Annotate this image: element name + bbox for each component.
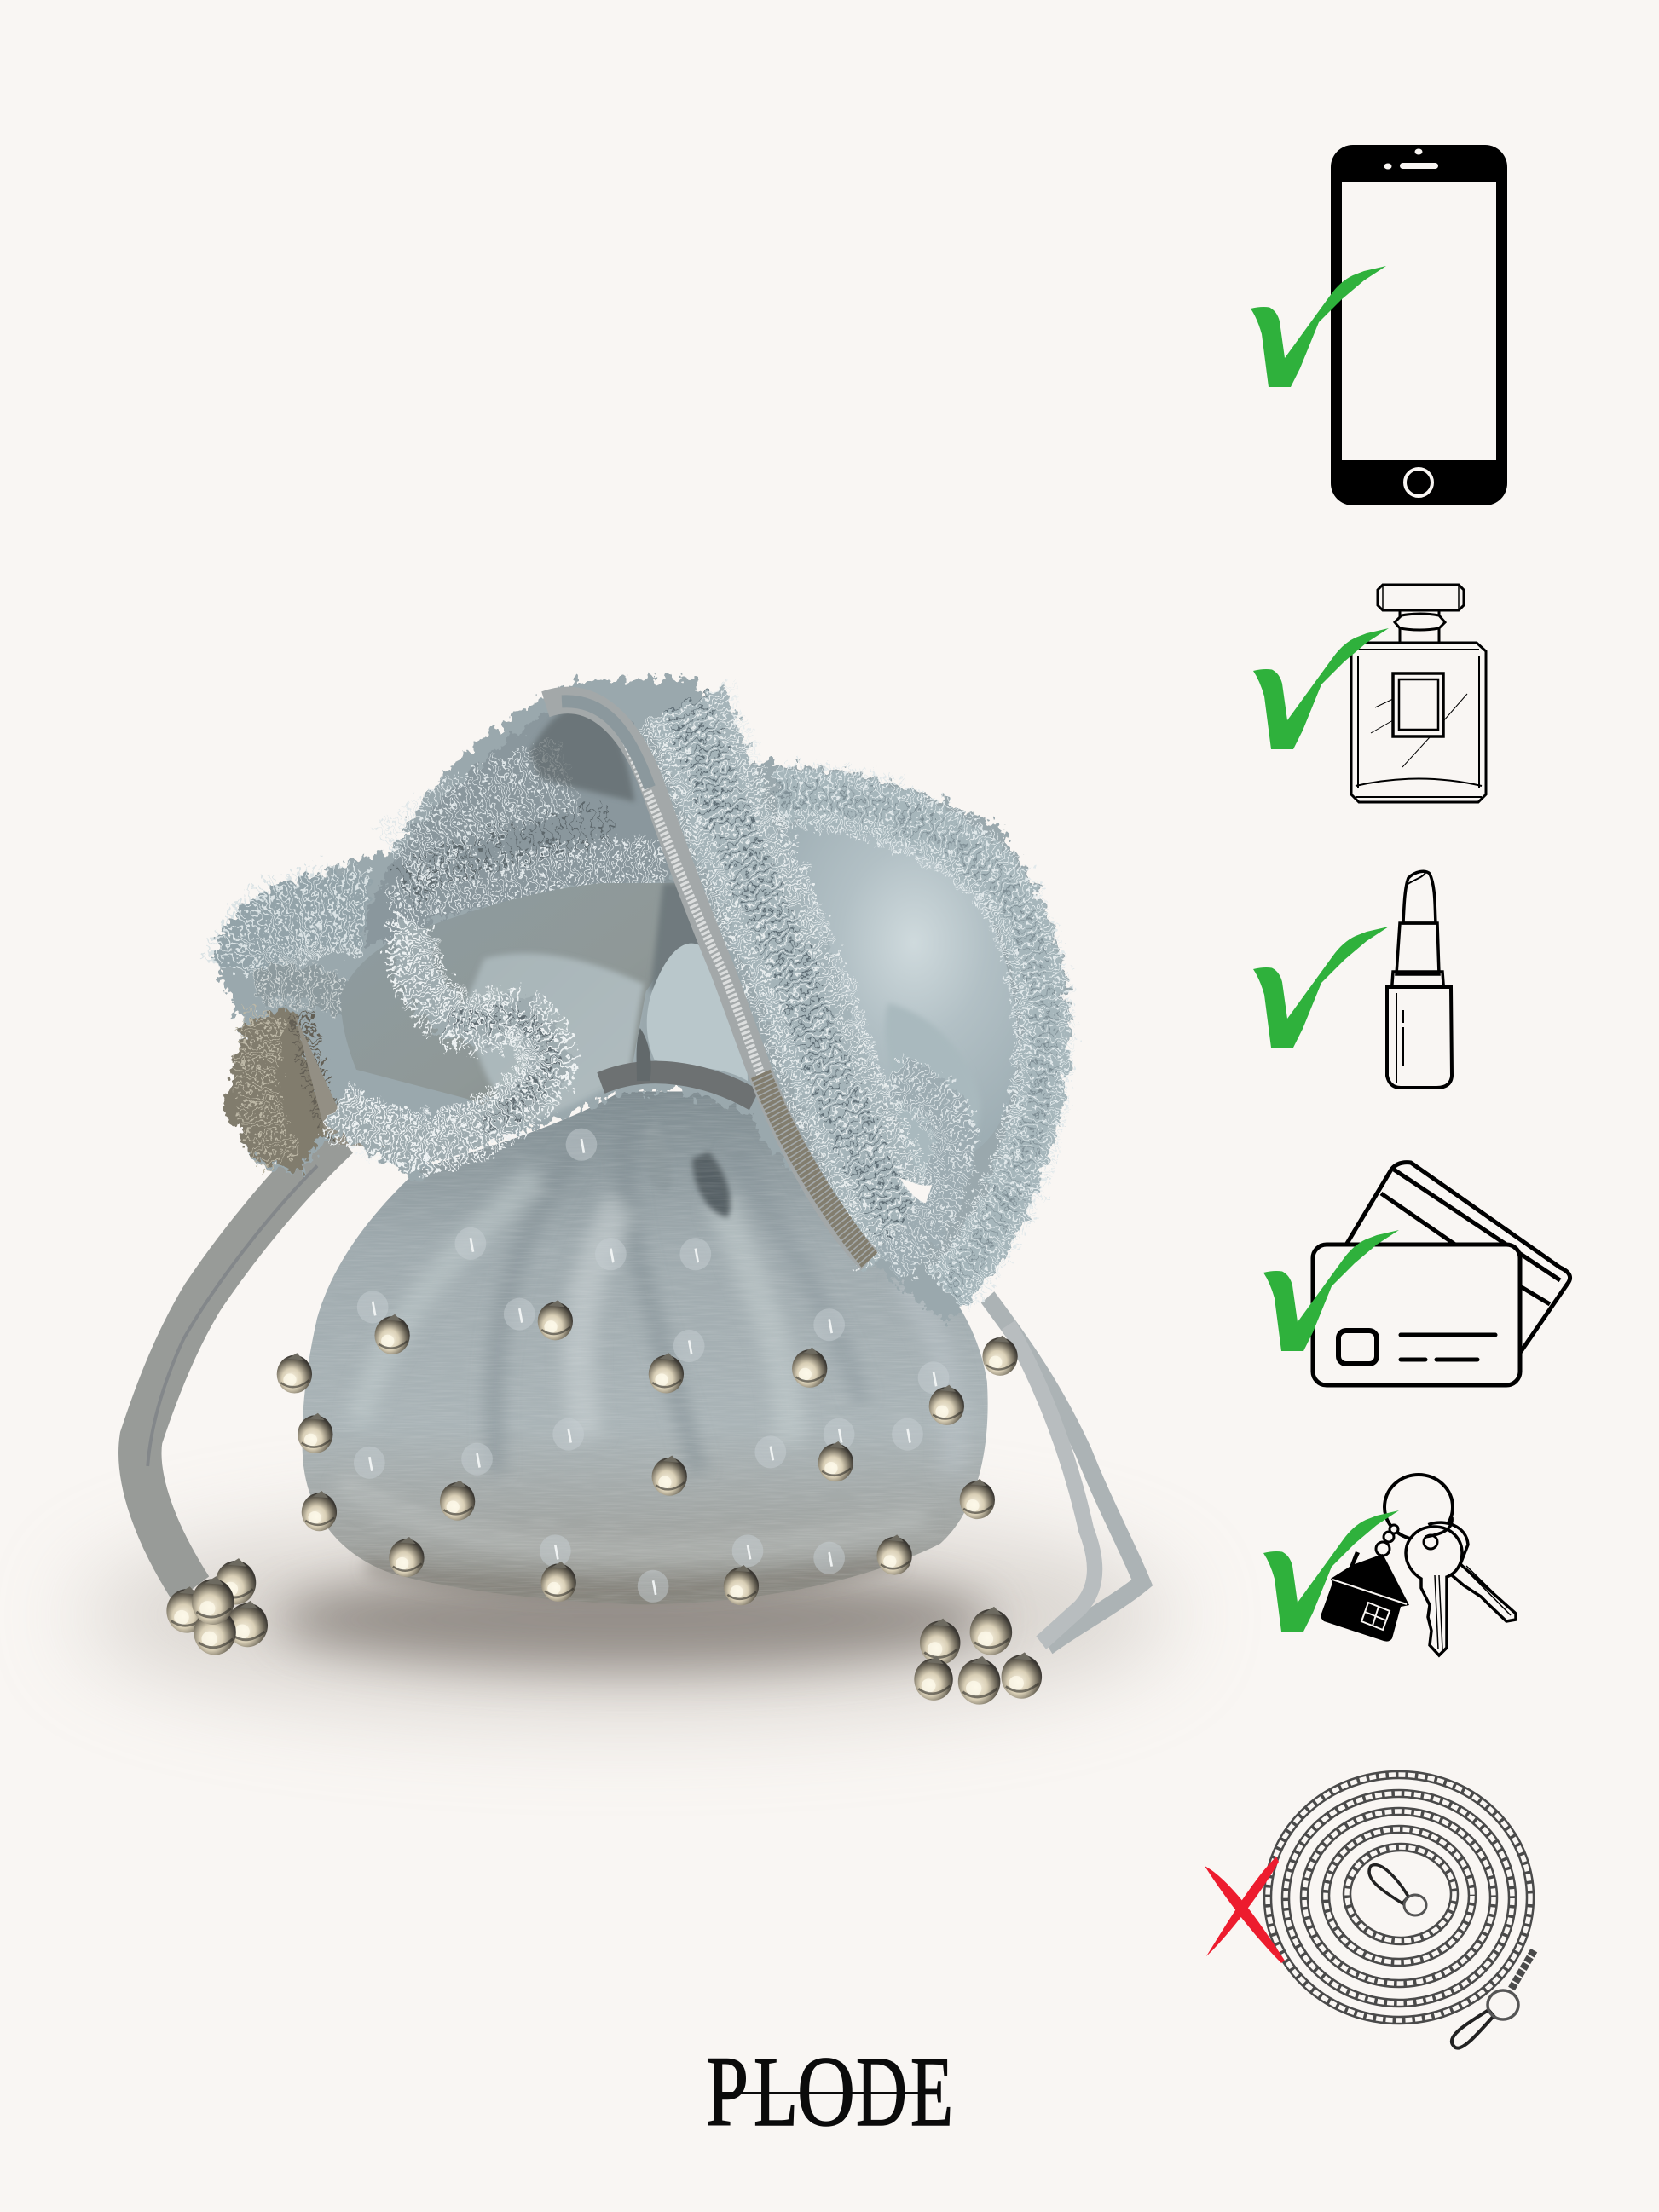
pouch body bbox=[302, 1092, 988, 1604]
check mark: lipstick allowed bbox=[1253, 927, 1389, 1048]
right tassel bell cluster bbox=[914, 1607, 1042, 1705]
item: coiled chain strap bbox=[1268, 1775, 1535, 2048]
left inner fabric bbox=[341, 883, 676, 1122]
item: lipstick bbox=[1387, 871, 1452, 1088]
brown left lower frill bbox=[223, 1008, 340, 1174]
jingle bells on pouch bbox=[277, 1300, 1018, 1605]
right main frill band bbox=[685, 703, 906, 1251]
house window and roof line bbox=[1332, 1580, 1407, 1630]
far-left blue frill bbox=[242, 909, 367, 1000]
back key bbox=[1430, 1522, 1516, 1621]
lower fold frill bbox=[888, 1077, 956, 1262]
right drawstrings bbox=[988, 1297, 1142, 1646]
lower fabric fold bbox=[885, 1003, 980, 1230]
house fob bbox=[1321, 1551, 1409, 1642]
pouch inner shadow slit bbox=[692, 1152, 731, 1217]
keychain beads bbox=[1376, 1525, 1398, 1556]
front key bbox=[1406, 1527, 1462, 1655]
brand logo: PLODE: E bbox=[910, 2036, 953, 2147]
gap showing background through ruffle bbox=[899, 1178, 933, 1204]
item: smartphone bbox=[1331, 145, 1507, 505]
cross mark: chain not included bbox=[1205, 1857, 1285, 1963]
item: house keychain and keys bbox=[1321, 1475, 1516, 1655]
right inner fabric disc bbox=[757, 811, 1018, 1157]
sequins on pouch bbox=[354, 1129, 949, 1603]
pouch gather creases bbox=[645, 1120, 672, 1192]
brand logo: PLODE bbox=[706, 2036, 953, 2147]
check mark: phone allowed bbox=[1251, 266, 1386, 387]
left drawstring bbox=[140, 1135, 338, 1590]
ring overlap arc bbox=[1425, 1517, 1452, 1537]
key hole and ring link bbox=[1435, 1566, 1514, 1649]
product photo: drawstring pouch bag bbox=[140, 679, 1142, 1705]
ruffle silhouette base bbox=[219, 679, 1070, 1321]
fabric weave texture bbox=[302, 1092, 988, 1604]
check mark: perfume allowed bbox=[1253, 628, 1389, 749]
tan fabric under left frill bbox=[294, 1014, 399, 1148]
left tassel bell cluster bbox=[166, 1558, 268, 1655]
bag floor shadow bbox=[81, 1517, 1172, 1713]
brand logo: PLODE: O bbox=[797, 2036, 855, 2147]
item: credit cards bbox=[1313, 1163, 1570, 1385]
knot fabric bbox=[601, 944, 754, 1100]
brand logo: PLODE: D bbox=[856, 2036, 907, 2147]
dark gap above knot bbox=[650, 883, 731, 1007]
check mark: keys allowed bbox=[1263, 1510, 1399, 1632]
back top frill bbox=[367, 697, 674, 950]
front-left frill band bbox=[335, 926, 550, 1142]
lighter fabric pillow bbox=[464, 954, 644, 1122]
brand logo: PLODE: P bbox=[706, 2036, 749, 2147]
key ring bbox=[1384, 1475, 1453, 1539]
check mark: cards allowed bbox=[1263, 1230, 1399, 1351]
dark shaded pocket inside top frill bbox=[529, 704, 635, 802]
pouch folds bbox=[340, 1120, 954, 1591]
silver trim ribbon bbox=[546, 700, 870, 1261]
right outer frill bbox=[777, 794, 1044, 1290]
brand logo: PLODE: L bbox=[754, 2036, 798, 2147]
item: perfume bottle bbox=[1351, 585, 1486, 802]
